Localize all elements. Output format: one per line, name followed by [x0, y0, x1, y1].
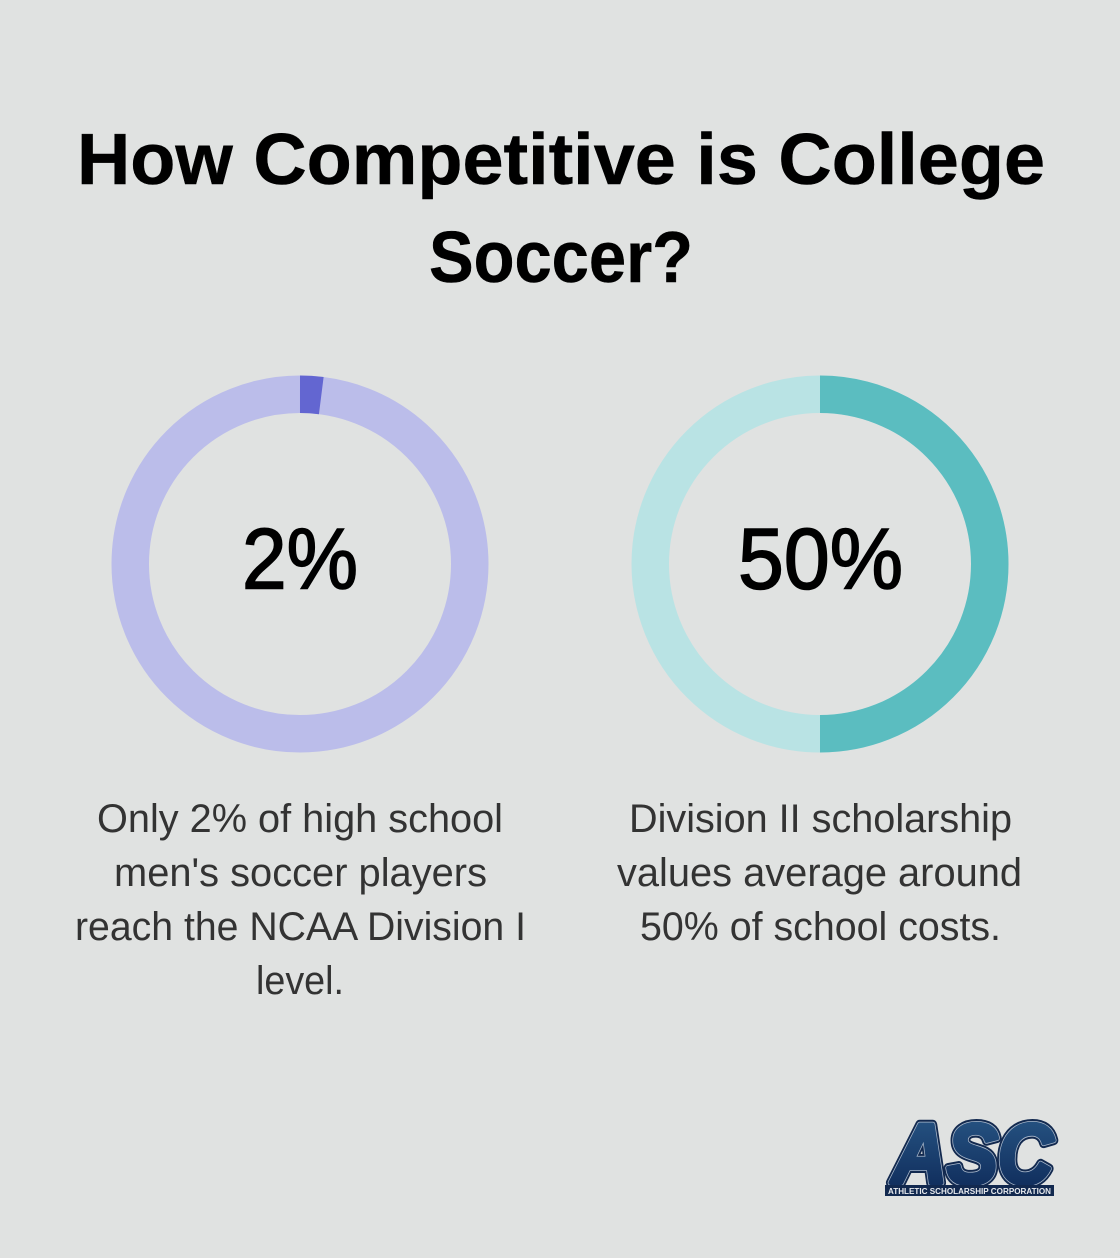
panel: 50% statistic [617, 394, 1022, 949]
description: 2% [75, 797, 526, 1003]
description: 2%: level. [256, 959, 344, 1003]
panel: 2% statistic [75, 394, 526, 1003]
description: 2%: men's soccer players [114, 851, 487, 895]
description: 2%: reach the NCAA Division I [75, 905, 526, 949]
logo: Athletic Scholarship Corporation: ATHLETIC SCHOLARSHIP CORPORATION [888, 1186, 1051, 1196]
logo: Athletic Scholarship Corporation [885, 1107, 1054, 1201]
description: 50%: Division II scholarship [629, 797, 1012, 841]
title: How Competitive is College [77, 120, 1045, 200]
description: 50% [617, 797, 1022, 949]
description: 50%: 50% of school costs. [640, 905, 1001, 949]
description: 2%: Only 2% of high school [97, 797, 503, 841]
value: 50%: 50% [738, 512, 903, 608]
description: 50%: values average around [617, 851, 1022, 895]
title: Soccer? [429, 218, 693, 298]
donut chart: 2% [130, 394, 470, 734]
value: 2%: 2% [242, 512, 358, 608]
title [77, 120, 1045, 298]
donut chart: 50% [650, 394, 990, 734]
